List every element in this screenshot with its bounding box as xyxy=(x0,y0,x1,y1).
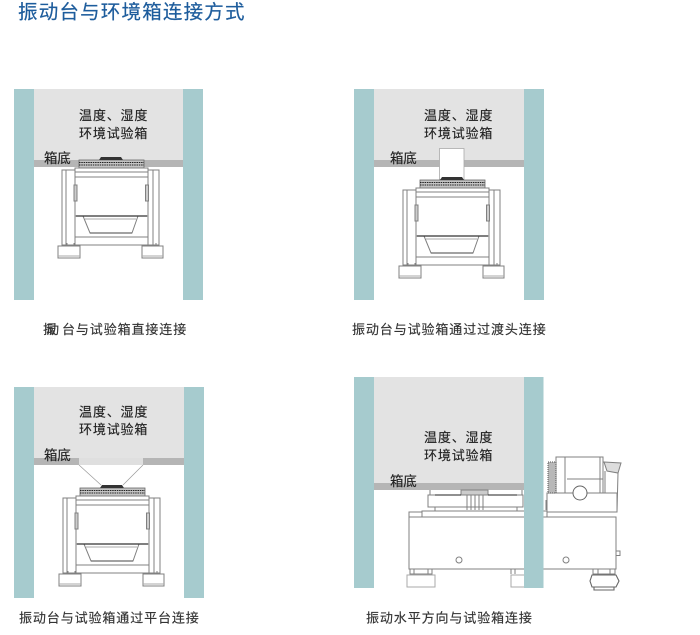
caption 1: 振 xyxy=(43,322,56,337)
shaker machine xyxy=(399,177,504,278)
chamber label: 环境试验箱 xyxy=(79,422,148,437)
chamber label: 环境试验箱 xyxy=(79,126,148,141)
chamber floor label: 箱底 xyxy=(44,151,70,166)
chamber label: 温度、湿度 xyxy=(424,430,493,445)
chamber label: 温度、湿度 xyxy=(79,108,148,123)
chamber label: 环境试验箱 xyxy=(424,126,493,141)
chamber floor label: 箱底 xyxy=(390,474,416,489)
adapter block xyxy=(440,148,464,180)
caption 1: 动 xyxy=(46,322,60,337)
caption 4: 振动水平方向与试验箱连接 xyxy=(366,610,533,626)
title: 振动台与环境箱连接方式 xyxy=(18,2,246,24)
caption 2: 振动台与试验箱通过过渡头连接 xyxy=(352,322,547,337)
chamber label: 环境试验箱 xyxy=(424,448,493,463)
panel: via adapter head xyxy=(354,89,544,300)
caption 3: 振动台与试验箱通过平台连接 xyxy=(19,610,200,626)
left wall xyxy=(354,377,374,588)
chamber floor label: 箱底 xyxy=(390,151,416,166)
chamber floor label: 箱底 xyxy=(44,448,70,463)
shaker machine xyxy=(59,485,164,586)
shaker machine xyxy=(58,157,163,258)
chamber label: 温度、湿度 xyxy=(79,404,148,420)
panel: horizontal connection xyxy=(354,377,621,590)
right wall xyxy=(524,377,544,588)
horizontal slip table machine xyxy=(407,457,621,590)
caption 1: 台与试验箱直接连接 xyxy=(62,322,187,337)
platform funnel xyxy=(79,458,143,485)
panel: via platform xyxy=(14,387,204,598)
chamber label: 温度、湿度 xyxy=(424,108,493,123)
panel: direct connection xyxy=(14,89,203,300)
